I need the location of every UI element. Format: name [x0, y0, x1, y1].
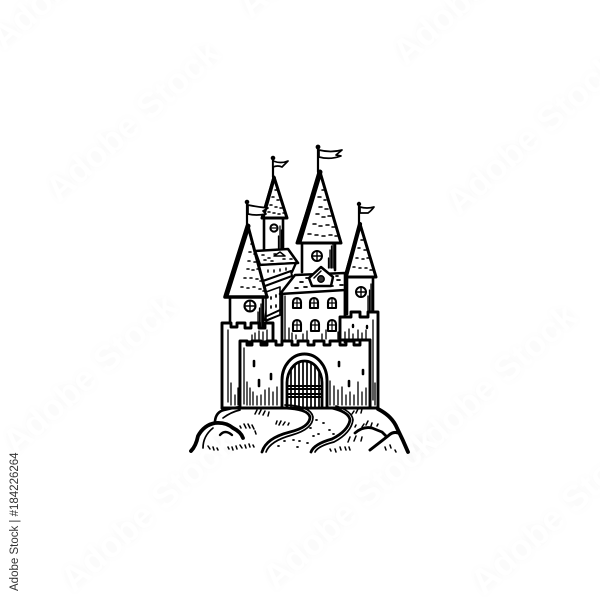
windows lower row — [293, 320, 336, 331]
watermarks: Adobe Stock — [254, 420, 445, 597]
watermarks: Adobe Stock — [52, 422, 243, 599]
dormer — [309, 267, 333, 286]
left tower — [225, 200, 268, 328]
middle roofs — [255, 249, 298, 321]
main building — [280, 267, 345, 342]
right road — [311, 406, 353, 452]
watermarks: Adobe Stock — [37, 32, 228, 209]
windows upper row — [293, 298, 336, 308]
credit line: Adobe Stock | #184226264 — [9, 452, 21, 591]
main wall — [240, 340, 370, 408]
gate — [282, 354, 327, 407]
left wall tower — [222, 323, 273, 408]
right tower — [345, 202, 376, 314]
centre tower — [297, 145, 342, 272]
hill and rocks — [191, 407, 408, 452]
back tower — [262, 156, 288, 251]
left road — [262, 405, 313, 452]
right wall tower — [340, 312, 378, 408]
watermarks: Adobe Stock — [394, 295, 585, 472]
